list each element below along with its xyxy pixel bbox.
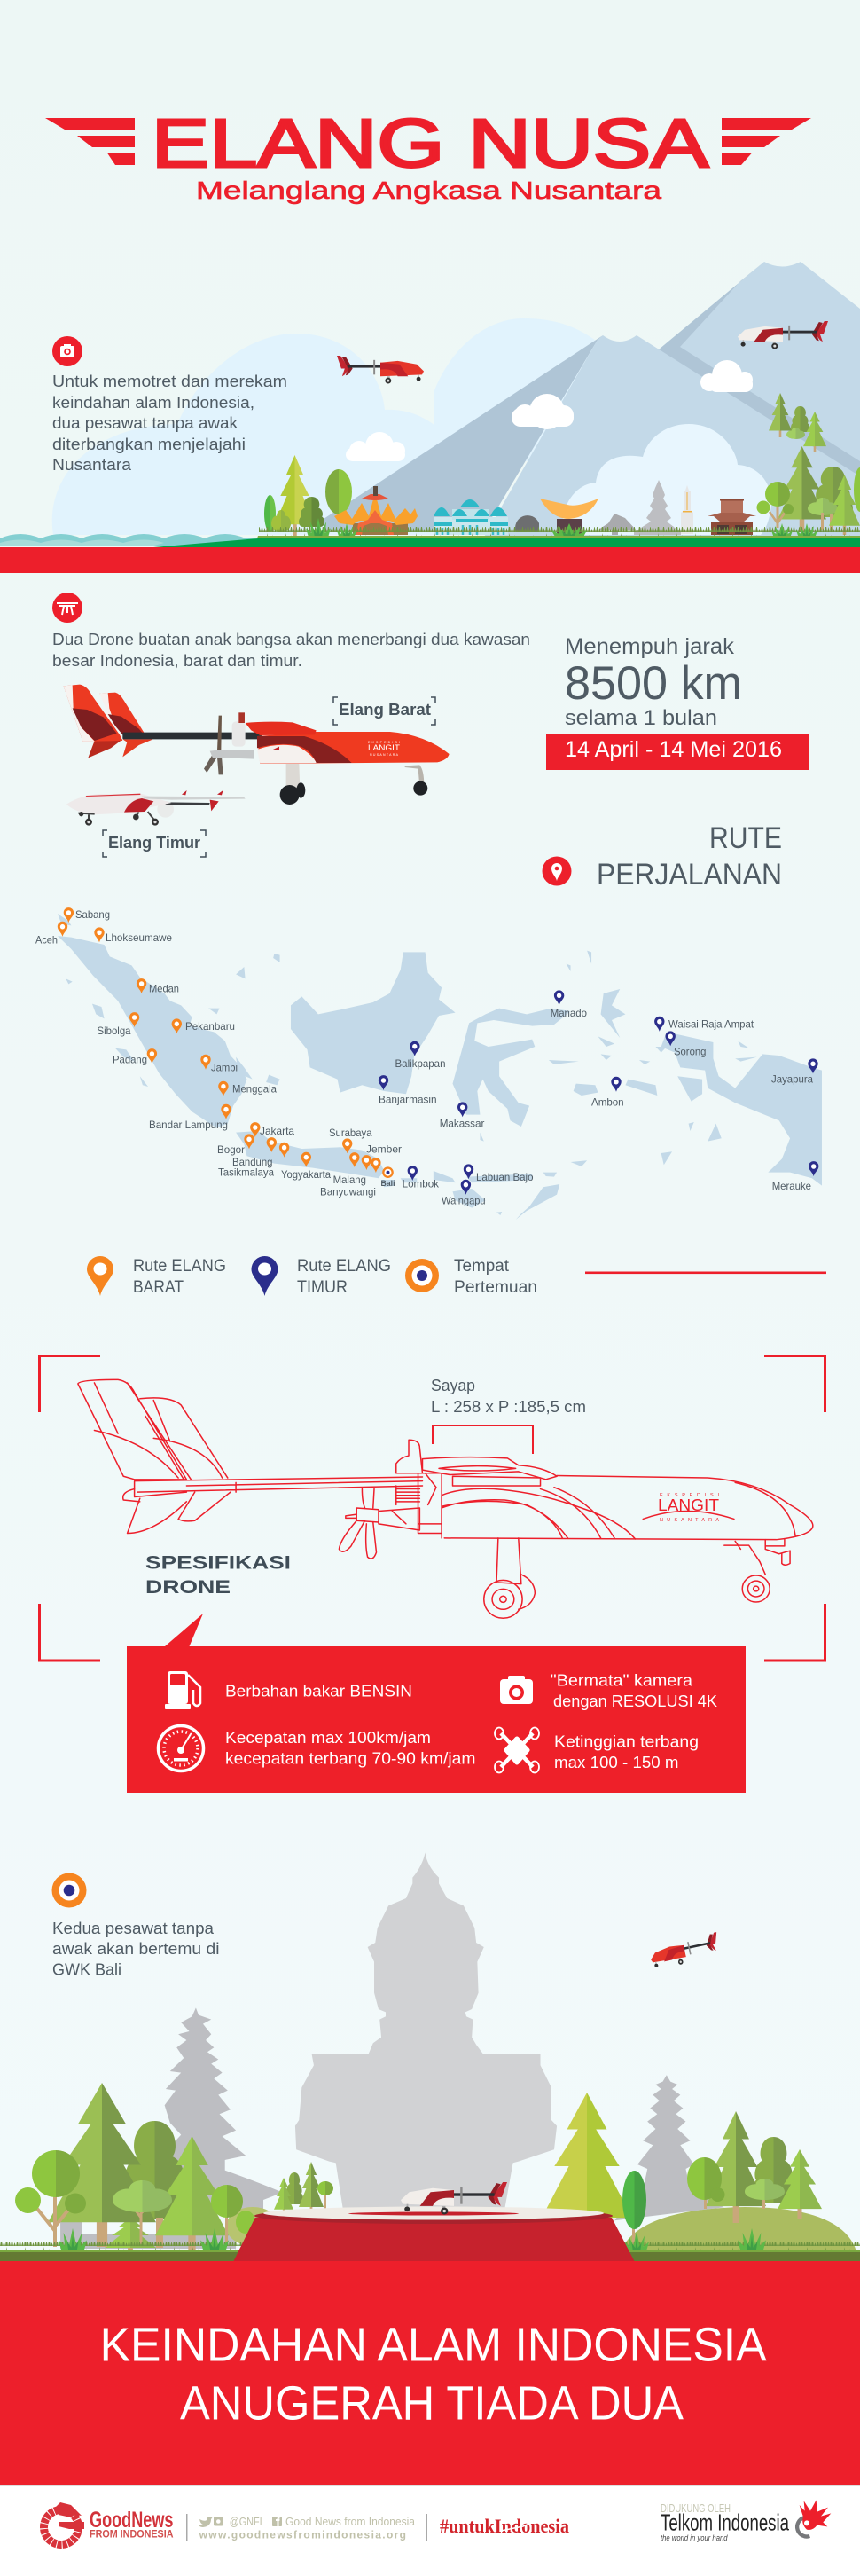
text: purpose: dua pesawat tanpa awak xyxy=(52,414,238,432)
island: Kalimantan xyxy=(291,952,456,1094)
landmark: Balinese pura xyxy=(634,480,681,535)
city: Banyuwangi: Banyuwangi xyxy=(320,1186,376,1198)
city: Sorong: Sorong xyxy=(674,1046,706,1058)
city: Jakarta xyxy=(250,1122,294,1137)
city: Bogor xyxy=(217,1134,254,1156)
map of Indonesia xyxy=(58,914,822,1220)
icon: quadcopter xyxy=(495,1728,539,1772)
trees right xyxy=(542,2093,822,2250)
city: Aceh xyxy=(35,922,67,946)
logo: GoodNews from Indonesia xyxy=(44,2502,174,2544)
social media xyxy=(199,2515,416,2541)
text: meeting at GWK Bali xyxy=(52,1920,220,1979)
distance block: selama 1 bulan xyxy=(565,706,717,730)
legend: Tempat Pertemuan: Tempat xyxy=(454,1257,510,1276)
subtitle: Melanglang Angkasa Nusantara xyxy=(196,177,662,204)
drone photo: Elang Barat xyxy=(64,685,450,805)
drone outline logo text xyxy=(658,1493,719,1523)
text: fuel: Berbahan bakar BENSIN xyxy=(225,1682,412,1700)
city: Labuan Bajo: Labuan Bajo xyxy=(476,1171,534,1183)
title: Elang Nusa with wings xyxy=(45,106,811,182)
legend: Rute Elang Timur: TIMUR xyxy=(297,1278,348,1297)
pedestal xyxy=(233,2207,635,2262)
label: Elang Timur: Elang Timur xyxy=(108,834,200,852)
grass and green ground xyxy=(153,518,860,547)
legend: Rute Elang Barat xyxy=(87,1256,226,1297)
legend: Tempat Pertemuan: Pertemuan xyxy=(454,1278,537,1297)
city: Bogor: Bogor xyxy=(217,1143,245,1156)
city: Jember: Jember xyxy=(366,1143,402,1156)
city: Labuan Bajo xyxy=(464,1164,534,1183)
legend xyxy=(87,1256,537,1297)
city: Tasikmalaya xyxy=(218,1143,289,1179)
foreground pale cloud xyxy=(562,424,771,535)
water waves xyxy=(0,534,258,546)
heading: Spesifikasi Drone: SPESIFIKASI xyxy=(145,1553,291,1574)
city: Banjarmasin xyxy=(379,1075,437,1105)
text: speed xyxy=(225,1729,475,1768)
back mountain xyxy=(659,262,860,497)
city: Menggala xyxy=(218,1081,277,1096)
city: Balikpapan: Balikpapan xyxy=(395,1057,445,1070)
text: altitude: Ketinggian terbang xyxy=(554,1733,699,1751)
icon: fuel pump xyxy=(165,1671,200,1709)
city: Sibolga xyxy=(98,1012,139,1037)
trees on mountain slope xyxy=(769,393,826,452)
date banner: 14 April - 14 Mei 2016 xyxy=(565,737,782,762)
text: speed: Kecepatan max 100km/jam xyxy=(225,1729,431,1747)
text: two drones intro xyxy=(52,631,530,670)
small islands xyxy=(58,914,757,1220)
text: altitude xyxy=(554,1733,699,1771)
city: Malang xyxy=(333,1152,366,1186)
city: Makassar: Makassar xyxy=(440,1117,484,1129)
drone logo text: LANGIT xyxy=(368,743,401,752)
logo: GoodNews from Indonesia: GoodNews xyxy=(90,2508,174,2533)
date banner xyxy=(546,734,809,770)
landmark: hut xyxy=(515,515,539,532)
legend: Tempat Pertemuan xyxy=(405,1257,537,1297)
city: Tasikmalaya: Tasikmalaya xyxy=(218,1166,274,1179)
city: Bandung xyxy=(232,1137,277,1168)
icon: speedometer xyxy=(158,1726,204,1771)
city: Lhokseumawe xyxy=(94,927,172,944)
city: Lhokseumawe: Lhokseumawe xyxy=(106,931,172,944)
front mountain xyxy=(324,335,860,538)
text: purpose: diterbangkan menjelajahi xyxy=(52,436,246,453)
text: meeting at GWK Bali: awak akan bertemu di xyxy=(52,1940,220,1958)
legend: Rute Elang Timur: Rute ELANG xyxy=(297,1257,391,1276)
text: purpose: keindahan alam Indonesia, xyxy=(52,394,254,412)
title: Elang Nusa with wings: ELANG NUSA xyxy=(152,106,709,182)
social media: www.goodnewsfromindonesia.org xyxy=(199,2529,406,2541)
text: meeting at GWK Bali: Kedua pesawat tanpa xyxy=(52,1920,215,1937)
icon: drone badge xyxy=(52,593,82,623)
logo: GoodNews from Indonesia: FROM INDONESIA xyxy=(90,2528,174,2541)
line drawing of drone xyxy=(78,1379,813,1618)
text: camera: "Bermata" kamera xyxy=(551,1672,693,1690)
city: Waisai Raja Ampat xyxy=(654,1017,754,1032)
trees left xyxy=(15,2083,255,2253)
hill xyxy=(226,2207,856,2251)
city: Surabaya xyxy=(329,1127,372,1153)
landmark: mosque xyxy=(434,499,508,535)
city: Banyuwangi xyxy=(320,1155,376,1198)
city: Bali meeting point: Bali xyxy=(381,1179,395,1188)
island: Sumatra xyxy=(58,936,246,1128)
city: Ambon xyxy=(591,1077,624,1108)
city: Waingapu xyxy=(442,1180,486,1207)
red band xyxy=(0,547,860,573)
city: Jakarta: Jakarta xyxy=(260,1125,294,1137)
distance block: Menempuh jarak xyxy=(565,634,734,659)
landmark: gray house xyxy=(598,514,636,535)
landmark: Tugu monument xyxy=(681,485,693,534)
trees right of landmarks xyxy=(757,446,860,535)
city: Yogyakarta xyxy=(281,1152,331,1181)
wing dimension: L : 258 x P :185,5 cm xyxy=(431,1398,586,1416)
gray Balinese temples xyxy=(60,2007,724,2249)
island: Java xyxy=(236,1131,384,1178)
drone photo: Elang Timur xyxy=(66,790,246,826)
trees left of landmarks xyxy=(264,455,352,537)
city: Jambi: Jambi xyxy=(211,1062,238,1074)
text: two drones intro: Dua Drone buatan anak bangsa akan menerbangi dua kawasan xyxy=(52,631,530,648)
route pins and city labels xyxy=(35,907,818,1207)
city: Merauke xyxy=(772,1161,818,1192)
social media: @GNFI xyxy=(230,2515,262,2528)
landscape scene: mountains, clouds, landmarks xyxy=(0,262,860,547)
closing banner: ANUGERAH TIADA DUA xyxy=(180,2377,684,2431)
trees behind statue xyxy=(274,2162,333,2215)
sponsor: Telkom Indonesia: Telkom Indonesia xyxy=(661,2509,789,2536)
city: Waingapu: Waingapu xyxy=(442,1195,486,1207)
legend: Rute Elang Barat: BARAT xyxy=(133,1278,184,1297)
heading: Spesifikasi Drone: DRONE xyxy=(145,1577,231,1598)
closing banner xyxy=(0,2261,860,2485)
city: Bandar Lampung: Bandar Lampung xyxy=(149,1119,228,1131)
city: Banjarmasin: Banjarmasin xyxy=(379,1093,437,1105)
city: Medan xyxy=(137,978,179,995)
city: Medan: Medan xyxy=(149,983,179,995)
text: speed: kecepatan terbang 70-90 km/jam xyxy=(225,1750,475,1768)
heading: Rute Perjalanan xyxy=(597,821,782,891)
legend: Rute Elang Timur xyxy=(252,1256,391,1297)
text: camera: dengan RESOLUSI 4K xyxy=(553,1692,717,1710)
city: Padang: Padang xyxy=(113,1054,147,1066)
city: Bali meeting point xyxy=(381,1166,395,1188)
city: Sibolga: Sibolga xyxy=(98,1025,131,1037)
city: Sabang xyxy=(64,907,110,923)
text: purpose: Untuk memotret dan merekam xyxy=(52,373,287,390)
label: Elang Timur xyxy=(103,830,206,857)
city: Bandar Lampung xyxy=(149,1104,231,1131)
white clouds xyxy=(346,360,753,461)
landmark: Sumatran house xyxy=(334,486,418,535)
island: Papua xyxy=(661,1032,822,1186)
drone logo text: EKSPEDISI xyxy=(368,741,400,744)
city: Pekanbaru xyxy=(172,1018,235,1033)
city: Lombok xyxy=(403,1166,440,1190)
hashtag: #untukIndonesia xyxy=(440,2515,569,2537)
distance block: 8500 km xyxy=(565,657,742,710)
icon: camera badge xyxy=(52,336,82,366)
city: Jember xyxy=(366,1143,402,1173)
drone outline logo text: EKSPEDISI xyxy=(660,1493,719,1498)
icon: location badge xyxy=(543,857,571,885)
flying drone: lower xyxy=(648,1932,722,1970)
text: two drones intro: besar Indonesia, barat dan timur. xyxy=(52,652,302,670)
icon: camera xyxy=(500,1676,533,1704)
social media: Good News from Indonesia xyxy=(285,2515,416,2528)
city: Pekanbaru: Pekanbaru xyxy=(185,1020,235,1033)
flying drone: left xyxy=(337,356,424,384)
island: Sulawesi xyxy=(453,1009,571,1127)
city: Makassar xyxy=(440,1102,484,1129)
heading: Rute Perjalanan: RUTE xyxy=(709,821,782,855)
label: Elang Barat: Elang Barat xyxy=(339,701,431,719)
text: meeting at GWK Bali: GWK Bali xyxy=(52,1961,121,1979)
legend: Rute Elang Barat: Rute ELANG xyxy=(133,1257,226,1276)
drone outline logo text: LANGIT xyxy=(658,1496,719,1514)
city: Jayapura xyxy=(771,1058,818,1085)
spec frame corners xyxy=(39,1355,825,1661)
city: Manado: Manado xyxy=(551,1007,587,1019)
city: Jambi xyxy=(200,1055,238,1074)
landmark: Toraja house xyxy=(540,499,598,534)
text: purpose: Nusantara xyxy=(52,456,132,474)
city: Surabaya: Surabaya xyxy=(329,1127,372,1139)
sponsor: Telkom Indonesia: DIDUKUNG OLEH xyxy=(661,2501,731,2515)
landmark: Joglo house xyxy=(708,499,756,535)
heading: Spesifikasi Drone xyxy=(145,1553,291,1598)
drone outline logo text: NUSANTARA xyxy=(660,1518,719,1523)
panel: drone specifications xyxy=(127,1614,746,1793)
distance block xyxy=(565,634,742,730)
city: Lombok: Lombok xyxy=(403,1178,440,1190)
city: Merauke: Merauke xyxy=(772,1180,811,1192)
city: Ambon: Ambon xyxy=(591,1096,624,1108)
sponsor: Telkom Indonesia: the world in your hand xyxy=(661,2533,728,2543)
sponsor: Telkom Indonesia xyxy=(661,2500,831,2543)
text: altitude: max 100 - 150 m xyxy=(554,1754,679,1771)
city: Manado xyxy=(551,990,587,1019)
text: purpose xyxy=(52,373,287,474)
drone logo text xyxy=(368,741,401,757)
GWK scene xyxy=(0,1852,860,2262)
city: Malang: Malang xyxy=(333,1174,366,1186)
city: Yogyakarta: Yogyakarta xyxy=(281,1168,331,1181)
pale background clouds xyxy=(52,318,603,535)
flying drone: right xyxy=(738,321,828,349)
grass and ground xyxy=(0,2228,860,2261)
city: Sorong xyxy=(665,1031,706,1058)
city: Padang xyxy=(113,1048,157,1066)
city: Bandung: Bandung xyxy=(232,1156,273,1168)
wing dimension: Sayap xyxy=(431,1377,475,1394)
city: Sabang: Sabang xyxy=(75,908,110,921)
closing banner: KEINDAHAN ALAM INDONESIA xyxy=(100,2319,767,2372)
GWK statue silhouette xyxy=(295,1852,557,2209)
city: Menggala: Menggala xyxy=(232,1083,277,1096)
parked drone on pedestal xyxy=(401,2182,507,2214)
heading: Rute Perjalanan: PERJALANAN xyxy=(597,858,782,891)
label: Elang Barat xyxy=(333,697,435,725)
city: Balikpapan xyxy=(395,1041,445,1070)
city: Aceh: Aceh xyxy=(35,934,58,946)
icon: meeting point badge xyxy=(51,1873,87,1907)
city: Waisai Raja Ampat: Waisai Raja Ampat xyxy=(668,1018,754,1031)
drone logo text: NUSANTARA xyxy=(370,753,399,757)
footer xyxy=(0,2485,860,2576)
wing dimension xyxy=(431,1377,586,1454)
city: Jayapura: Jayapura xyxy=(771,1072,813,1085)
text: camera xyxy=(551,1672,717,1710)
